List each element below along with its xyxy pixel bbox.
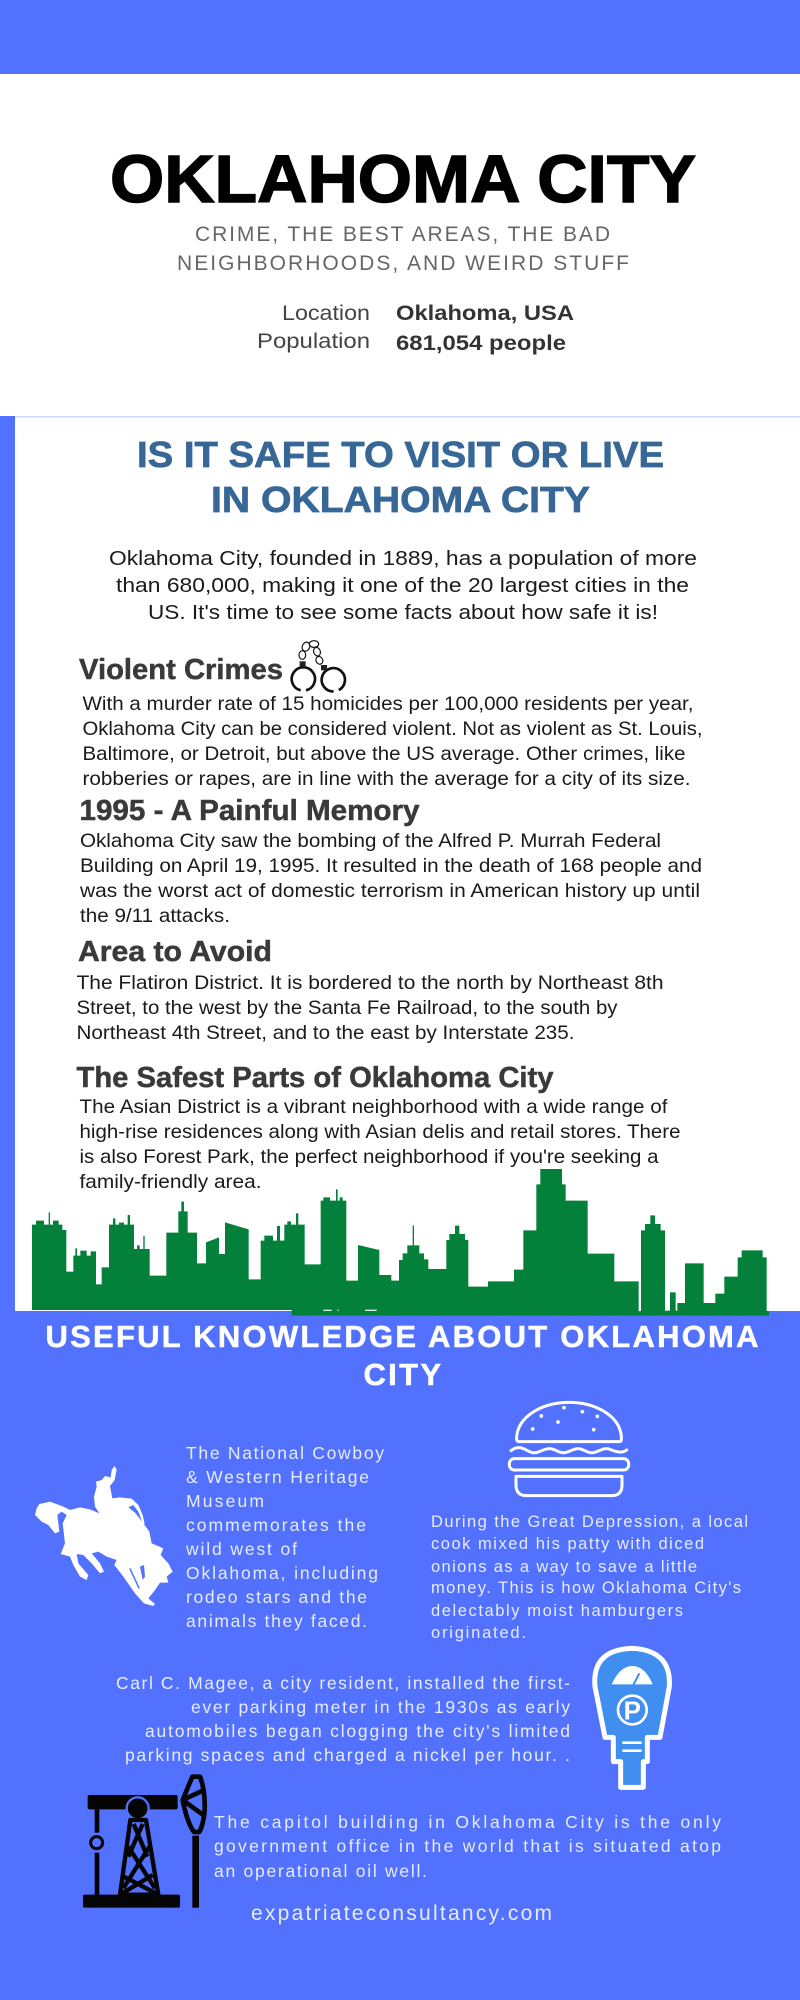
text: capitol oil well: an operational oil well. <box>214 1861 427 1881</box>
text: parking meter history: automobiles began clogging the city's limited <box>145 1721 570 1741</box>
text: hamburger history: During the Great Depression, a local <box>431 1513 748 1531</box>
panel: header <box>0 74 800 416</box>
text: capitol oil well <box>214 1812 721 1881</box>
text: 1995: Building on April 19, 1995. It resulted in the death of 168 people and <box>80 855 702 877</box>
text: cowboy museum: animals they faced. <box>186 1611 367 1631</box>
text: area to avoid: Northeast 4th Street, and to the east by Interstate 235. <box>76 1022 574 1044</box>
intro paragraph: Oklahoma City, founded in 1889, has a population of more <box>109 547 697 570</box>
intro paragraph <box>109 547 697 624</box>
section heading: IS IT SAFE TO VISIT OR LIVE <box>137 434 664 475</box>
heading: useful knowledge: CITY <box>364 1357 441 1392</box>
heading: useful knowledge <box>46 1319 758 1392</box>
heading: area to avoid: Area to Avoid <box>78 936 272 968</box>
population row: Population <box>257 330 370 353</box>
text: cowboy museum: wild west of <box>185 1539 297 1559</box>
text: cowboy museum: commemorates the <box>186 1515 366 1535</box>
text: hamburger history: delectably moist hamburgers <box>431 1602 683 1620</box>
text: 1995 <box>79 830 702 927</box>
text: violent crimes: Baltimore, or Detroit, but above the US average. Other crimes, like <box>82 743 686 765</box>
text: cowboy museum: & Western Heritage <box>186 1467 369 1487</box>
text: cowboy museum: Museum <box>186 1491 264 1511</box>
text: cowboy museum <box>185 1443 384 1631</box>
heading: violent crimes: Violent Crimes <box>79 654 283 686</box>
heading: useful knowledge: USEFUL KNOWLEDGE ABOUT OKLAHOMA <box>46 1319 758 1354</box>
icon: parking meter <box>595 1648 669 1787</box>
text: hamburger history: cook mixed his patty with diced <box>431 1535 704 1553</box>
subtitle: NEIGHBORHOODS, AND WEIRD STUFF <box>177 252 629 275</box>
text: cowboy museum: The National Cowboy <box>186 1443 384 1463</box>
location row: Location <box>282 302 370 325</box>
text: 1995: was the worst act of domestic terrorism in American history up until <box>79 880 700 902</box>
text: area to avoid: Street, to the west by the Santa Fe Railroad, to the south by <box>76 997 618 1019</box>
text: cowboy museum: Oklahoma, including <box>186 1563 378 1583</box>
icon: bucking horse and rider <box>35 1466 173 1606</box>
icon: parking meter: P <box>624 1695 641 1725</box>
section heading <box>137 434 664 520</box>
panel: safety section <box>15 416 800 1311</box>
text: violent crimes: Oklahoma City can be considered violent. Not as violent as St. Louis, <box>82 718 702 740</box>
text: area to avoid <box>76 972 664 1044</box>
heading: safest parts: The Safest Parts of Oklahoma City <box>76 1062 554 1094</box>
icon: handcuffs <box>292 641 348 694</box>
title: OKLAHOMA CITY <box>110 142 696 217</box>
footer url: expatriateconsultancy.com <box>251 1902 552 1925</box>
text: hamburger history <box>431 1513 748 1642</box>
text: parking meter history: parking spaces and charged a nickel per hour. . <box>125 1745 570 1765</box>
text: safest parts: family-friendly area. <box>80 1171 262 1193</box>
heading: 1995: 1995 - A Painful Memory <box>80 795 420 827</box>
subtitle: CRIME, THE BEST AREAS, THE BAD <box>195 223 610 246</box>
text: parking meter history: Carl C. Magee, a city resident, installed the first- <box>116 1673 570 1693</box>
text: safest parts: The Asian District is a vibrant neighborhood with a wide range of <box>80 1096 668 1118</box>
text: parking meter history: ever parking meter in the 1930s as early <box>191 1697 570 1717</box>
intro paragraph: US. It's time to see some facts about how safe it is! <box>148 601 658 624</box>
subtitle <box>177 223 629 275</box>
text: 1995: the 9/11 attacks. <box>80 905 230 927</box>
section heading: IN OKLAHOMA CITY <box>211 479 590 520</box>
text: cowboy museum: rodeo stars and the <box>186 1587 367 1607</box>
intro paragraph: than 680,000, making it one of the 20 largest cities in the <box>116 574 689 597</box>
text: hamburger history: money. This is how Oklahoma City's <box>431 1579 741 1597</box>
text: area to avoid: The Flatiron District. It is bordered to the north by Northeast 8th <box>76 972 664 994</box>
chart: city skyline <box>32 1169 769 1316</box>
text: violent crimes: robberies or rapes, are in line with the average for a city of its size. <box>82 768 690 790</box>
text: safest parts: is also Forest Park, the perfect neighborhood if you're seeking a <box>80 1146 659 1168</box>
text: 1995: Oklahoma City saw the bombing of the Alfred P. Murrah Federal <box>80 830 661 852</box>
icon: hamburger <box>509 1402 629 1496</box>
population row: 681,054 people <box>396 332 566 355</box>
text: violent crimes <box>82 693 702 790</box>
text: parking meter history <box>116 1673 570 1765</box>
text: capitol oil well: The capitol building in Oklahoma City is the only <box>214 1812 721 1832</box>
text: safest parts <box>80 1096 680 1193</box>
location row: Oklahoma, USA <box>396 302 574 325</box>
text: violent crimes: With a murder rate of 15 homicides per 100,000 residents per year, <box>82 693 694 715</box>
text: capitol oil well: government office in the world that is situated atop <box>214 1836 721 1856</box>
text: safest parts: high-rise residences along with Asian delis and retail stores. There <box>80 1121 680 1143</box>
icon: oil pump <box>83 1777 205 1908</box>
population row <box>257 330 566 355</box>
location row <box>282 302 574 325</box>
text: hamburger history: originated. <box>431 1624 526 1642</box>
text: hamburger history: onions as a way to save a little <box>431 1558 697 1576</box>
